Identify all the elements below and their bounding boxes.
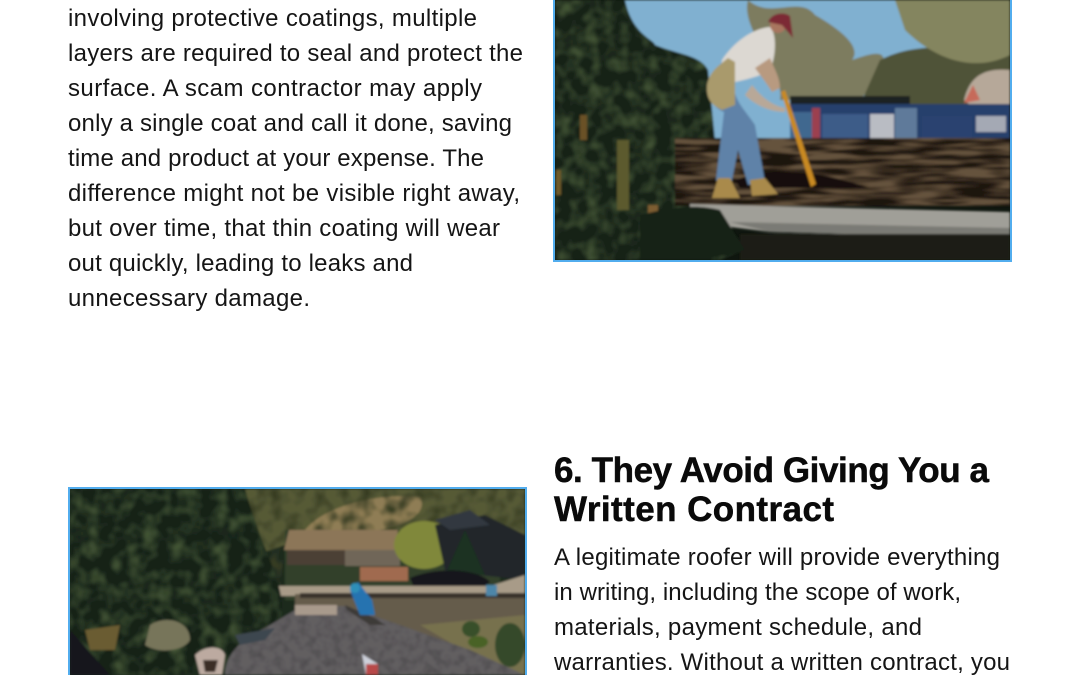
text block: written contract paragraph: A legitimate roofer will provide everything <box>554 544 1000 571</box>
photo: roofer working on a worn shingle roof <box>554 0 1011 261</box>
heading: section 6: Written Contract <box>554 490 834 529</box>
text block: protective coatings paragraph: but over time, that thin coating will wear <box>68 215 500 242</box>
photo: aerial view of roofers on a grey roof <box>69 488 526 675</box>
text block: written contract paragraph: materials, payment schedule, and <box>554 614 922 641</box>
text block: protective coatings paragraph: layers are required to seal and protect the <box>68 40 523 67</box>
text block: protective coatings paragraph: involving protective coatings, multiple <box>68 5 477 32</box>
text block: written contract paragraph <box>553 544 1010 675</box>
text block: written contract paragraph: in writing, including the scope of work, <box>554 579 961 606</box>
text block: protective coatings paragraph: out quickly, leading to leaks and <box>68 250 413 277</box>
heading: section 6 <box>554 451 990 529</box>
text block: protective coatings paragraph <box>68 5 523 312</box>
heading: section 6: 6. They Avoid Giving You a <box>554 451 990 490</box>
text block: protective coatings paragraph: surface. A scam contractor may apply <box>68 75 482 102</box>
text block: protective coatings paragraph: only a single coat and call it done, saving <box>68 110 512 137</box>
text block: protective coatings paragraph: difference might not be visible right away, <box>68 180 520 207</box>
text block: protective coatings paragraph: time and product at your expense. The <box>68 145 484 172</box>
text block: protective coatings paragraph: unnecessary damage. <box>68 285 310 312</box>
